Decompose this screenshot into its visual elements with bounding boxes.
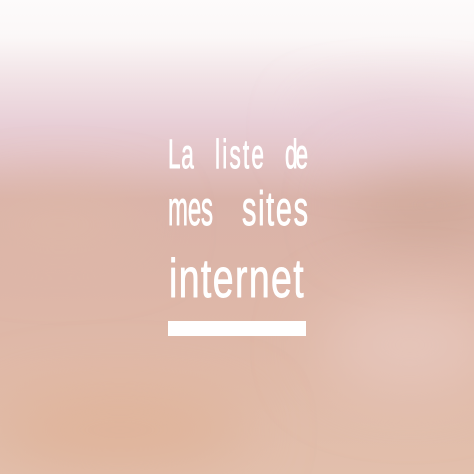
title line 2: sites [242,183,308,236]
title line 1 [168,132,308,178]
title line 3: internet [169,247,304,309]
title [168,132,308,309]
title line 2 [168,183,308,236]
underline bar [168,321,306,336]
title line 1: liste [215,132,264,178]
title line 1: de [285,132,308,178]
title line 2: mes [168,183,213,236]
title line 1: La [168,132,194,178]
